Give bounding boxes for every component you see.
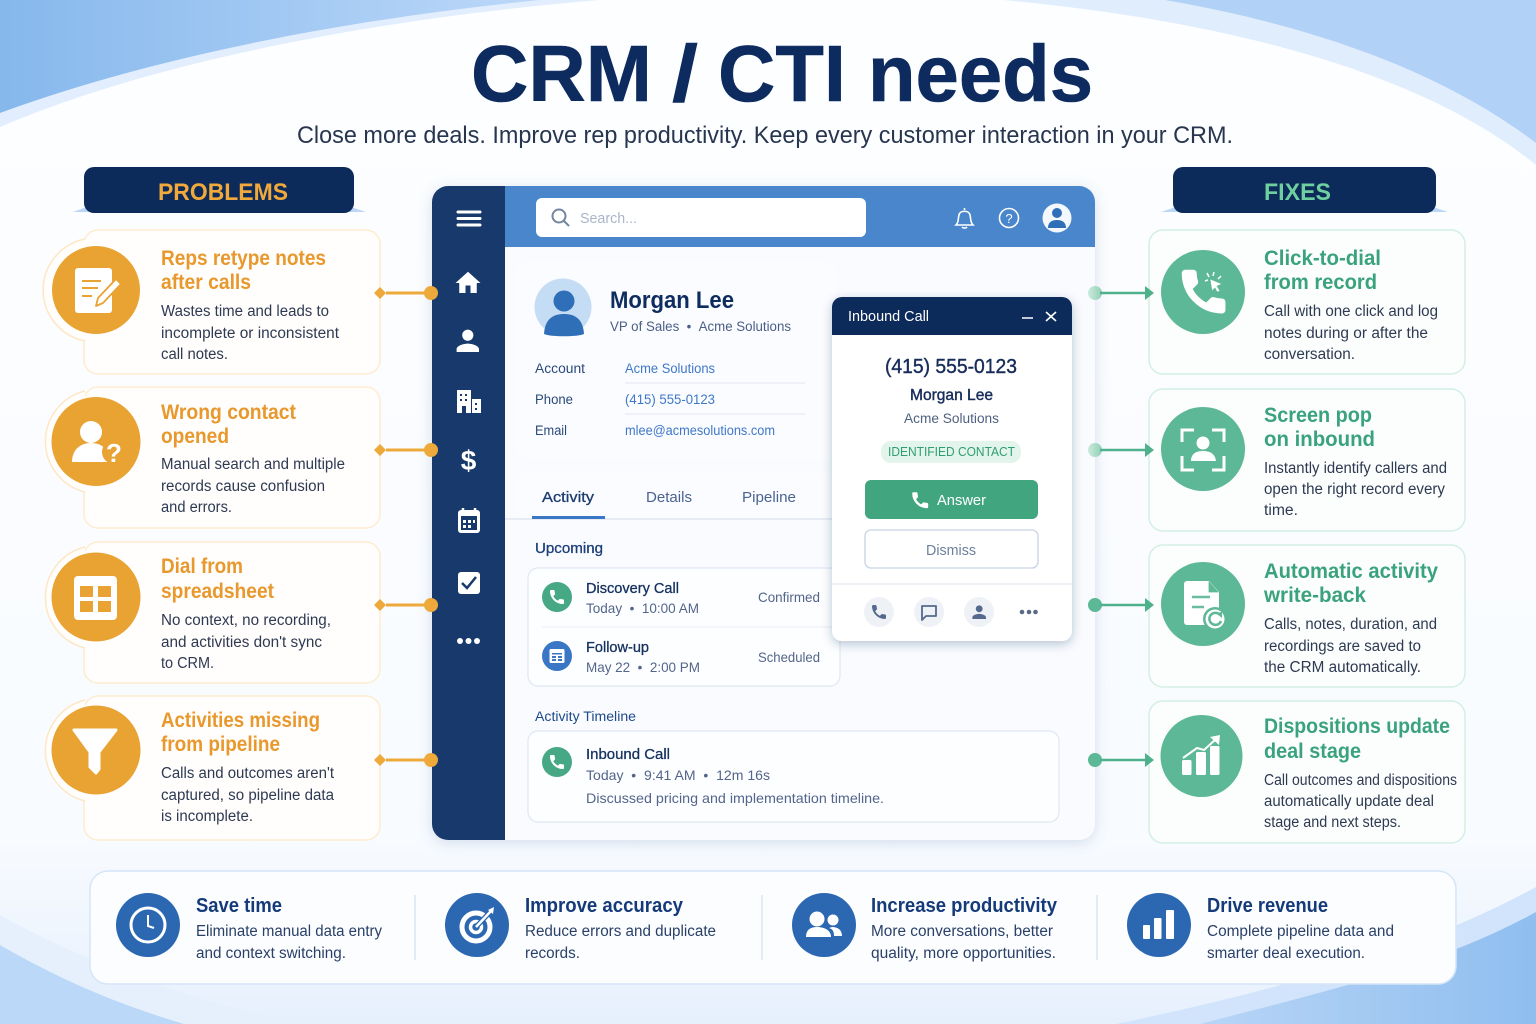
sidebar navigation: [432, 186, 505, 840]
icon: rising bars: [1160, 715, 1242, 797]
icon: spreadsheet grid: [52, 552, 140, 642]
icon: checkbox: [458, 572, 480, 594]
follow-up row: [542, 640, 820, 675]
icon: building: [457, 390, 481, 413]
contact profile: VP of Sales • Acme Solutions: [610, 319, 791, 334]
connectors: problems to CRM: [374, 286, 438, 767]
problem card: reps retype notes: Wastes time and leads to: [161, 303, 329, 320]
problem card: reps retype notes: Reps retype notes: [161, 247, 326, 270]
icon: screen pop frame: [1161, 407, 1245, 491]
benefit: increase productivity: quality, more opportunities.: [871, 945, 1056, 962]
fix card: dispositions update deal stage: automatically update deal: [1264, 793, 1434, 810]
fix card: click-to-dial: Click-to-dial: [1264, 247, 1381, 270]
activity timeline entry: Inbound Call: [586, 747, 670, 763]
tabs: [505, 473, 837, 519]
icon: calendar: [458, 508, 480, 533]
fix card: dispositions update deal stage: stage and next steps.: [1264, 814, 1401, 831]
fix card: screen pop: [1149, 389, 1465, 531]
benefit: save time: [116, 893, 382, 962]
icon: user avatar: [1042, 204, 1072, 232]
icon: people: [792, 893, 856, 957]
benefit: increase productivity: Increase productivity: [871, 895, 1058, 917]
icon: notes and pencil: [52, 246, 140, 334]
fix card: dispositions update deal stage: [1149, 701, 1465, 843]
fix card: click-to-dial: notes during or after the: [1264, 325, 1428, 342]
problem card: wrong contact opened: [45, 387, 380, 528]
icon: phone with cursor: [1161, 250, 1245, 334]
heading: fixes: [1161, 167, 1448, 213]
benefit: drive revenue: smarter deal execution.: [1207, 945, 1365, 962]
fix card: dispositions update deal stage: Dispositions update: [1264, 715, 1450, 738]
dismiss button: [865, 530, 1038, 568]
fix card: automatic activity write-back: recordings are saved to: [1264, 638, 1421, 655]
fix card: automatic activity write-back: Automatic activity: [1264, 560, 1438, 583]
icon: dollar: $: [461, 445, 477, 476]
icon: document with sync: [1161, 562, 1245, 646]
icon: more: [457, 638, 480, 644]
answer button: Answer: [937, 493, 986, 509]
benefit: increase productivity: More conversations, better: [871, 923, 1053, 940]
panel: fix cards: [1149, 230, 1465, 843]
activity timeline entry: Discussed pricing and implementation timeline.: [586, 790, 884, 806]
benefit: drive revenue: [1127, 893, 1394, 962]
fix card: automatic activity write-back: [1149, 545, 1465, 687]
contact profile: Email: [535, 423, 567, 438]
problem card: dial from spreadsheet: to CRM.: [161, 655, 214, 672]
subtitle: Close more deals. Improve rep productivity. Keep every customer interaction in your CRM.: [297, 122, 1233, 149]
problem card: dial from spreadsheet: [45, 542, 380, 683]
top header bar: [505, 186, 1095, 247]
icon: menu: [458, 212, 480, 225]
fix card: dispositions update deal stage: Call outcomes and dispositions: [1264, 772, 1457, 789]
fix card: click-to-dial: [1149, 230, 1465, 374]
inbound call popup: [832, 297, 1072, 641]
discovery call row: Discovery Call: [586, 581, 679, 597]
contact profile: Account: [535, 361, 585, 376]
discovery call row: Confirmed: [758, 589, 820, 605]
problem card: activities missing from pipeline: is incomplete.: [161, 808, 253, 825]
follow-up row: May 22 • 2:00 PM: [586, 659, 700, 675]
panel: benefits strip: [90, 871, 1456, 984]
fix card: dispositions update deal stage: deal stage: [1264, 740, 1361, 763]
activity timeline entry: [528, 731, 1059, 822]
problem card: wrong contact opened: records cause confusion: [161, 478, 325, 495]
fix card: click-to-dial: conversation.: [1264, 346, 1355, 363]
benefit: improve accuracy: Reduce errors and duplicate: [525, 923, 716, 940]
follow-up row: Follow-up: [586, 640, 649, 656]
benefit: drive revenue: Complete pipeline data and: [1207, 923, 1394, 940]
title: [471, 29, 1093, 118]
title: /: [672, 29, 698, 118]
problem card: dial from spreadsheet: No context, no recording,: [161, 612, 331, 629]
upcoming activities list: [528, 568, 840, 686]
heading: problems: PROBLEMS: [158, 179, 288, 206]
problem card: reps retype notes: call notes.: [161, 346, 228, 363]
contact profile: Morgan Lee: [610, 287, 734, 314]
answer button: [865, 480, 1038, 519]
icon: person: [457, 330, 479, 352]
benefit: improve accuracy: [445, 893, 716, 962]
icon: clock: [116, 893, 180, 957]
panel: problem cards: [43, 230, 380, 840]
connectors: CRM to fixes: [1088, 286, 1154, 767]
search box: Search...: [580, 211, 637, 227]
fix card: automatic activity write-back: the CRM automatically.: [1264, 659, 1421, 676]
inbound call popup: (415) 555-0123: [885, 355, 1017, 378]
problem card: activities missing from pipeline: captured, so pipeline data: [161, 787, 334, 804]
problem card: reps retype notes: [43, 230, 380, 374]
problem card: dial from spreadsheet: and activities don't sync: [161, 634, 322, 651]
inbound call popup: Acme Solutions: [904, 411, 999, 426]
discovery call row: [542, 581, 820, 616]
icon: home: [456, 272, 480, 293]
benefit: improve accuracy: records.: [525, 945, 580, 962]
profile avatar: [534, 278, 592, 336]
benefit: increase productivity: [792, 893, 1058, 962]
problem card: activities missing from pipeline: Calls and outcomes aren't: [161, 765, 335, 782]
icon: bell: [956, 208, 973, 228]
problem card: activities missing from pipeline: from pipeline: [161, 733, 280, 756]
benefit: improve accuracy: Improve accuracy: [525, 895, 684, 917]
problem card: activities missing from pipeline: Activities missing: [161, 709, 320, 732]
heading: fixes: FIXES: [1264, 179, 1331, 206]
fix card: click-to-dial: Call with one click and log: [1264, 303, 1438, 320]
benefit: save time: and context switching.: [196, 945, 346, 962]
benefit: save time: Save time: [196, 895, 282, 917]
icon: funnel: [52, 706, 140, 794]
activity timeline entry: Today • 9:41 AM • 12m 16s: [586, 767, 770, 783]
problem card: activities missing from pipeline: [45, 696, 380, 840]
follow-up row: Scheduled: [758, 649, 820, 665]
fix card: screen pop: Instantly identify callers and: [1264, 460, 1447, 477]
tabs: Details: [646, 489, 692, 506]
identified contact badge: IDENTIFIED CONTACT: [888, 445, 1015, 459]
problem card: dial from spreadsheet: spreadsheet: [161, 580, 274, 603]
fix card: screen pop: Screen pop: [1264, 404, 1372, 427]
fix card: screen pop: on inbound: [1264, 428, 1375, 451]
fix card: screen pop: time.: [1264, 502, 1298, 519]
title: needs: [868, 29, 1093, 118]
tabs: Pipeline: [742, 489, 796, 506]
icon: person with question mark: ?: [106, 438, 122, 468]
heading: problems: [73, 167, 366, 213]
activity timeline heading: Activity Timeline: [535, 709, 636, 724]
contact profile: [516, 262, 836, 458]
benefit: drive revenue: Drive revenue: [1207, 895, 1328, 917]
inbound call popup: Morgan Lee: [910, 387, 993, 404]
popup action icons: [864, 597, 1038, 627]
title: CTI: [718, 29, 846, 118]
fix card: screen pop: open the right record every: [1264, 481, 1445, 498]
fix card: automatic activity write-back: Calls, notes, duration, and: [1264, 616, 1437, 633]
problem card: wrong contact opened: Manual search and multiple: [161, 456, 345, 473]
contact profile: mlee@acmesolutions.com: [625, 423, 775, 438]
tabs: Activity: [542, 489, 595, 506]
panel: CRM application window: [432, 186, 1095, 840]
icon: bar chart: [1127, 893, 1191, 957]
benefit: save time: Eliminate manual data entry: [196, 923, 382, 940]
upcoming heading: Upcoming: [535, 540, 603, 557]
problem card: wrong contact opened: opened: [161, 425, 229, 448]
contact profile: Acme Solutions: [625, 361, 715, 376]
fix card: click-to-dial: from record: [1264, 271, 1377, 294]
contact profile: (415) 555-0123: [625, 392, 715, 407]
icon: help: ?: [1005, 211, 1013, 226]
icon: person with question mark: [52, 397, 140, 486]
dismiss button: Dismiss: [926, 543, 976, 559]
contact profile: Phone: [535, 392, 573, 407]
problem card: wrong contact opened: Wrong contact: [161, 401, 296, 424]
search box: [536, 198, 866, 237]
inbound call popup: Inbound Call: [848, 309, 929, 325]
problem card: reps retype notes: incomplete or inconsistent: [161, 325, 340, 342]
icon: help: [1000, 208, 1018, 228]
problem card: reps retype notes: after calls: [161, 271, 251, 294]
problem card: dial from spreadsheet: Dial from: [161, 555, 243, 578]
discovery call row: Today • 10:00 AM: [586, 600, 699, 616]
icon: target: [445, 893, 509, 957]
fix card: automatic activity write-back: write-back: [1263, 584, 1366, 607]
problem card: wrong contact opened: and errors.: [161, 499, 232, 516]
title: CRM: [471, 29, 652, 118]
identified contact badge: [881, 441, 1021, 463]
